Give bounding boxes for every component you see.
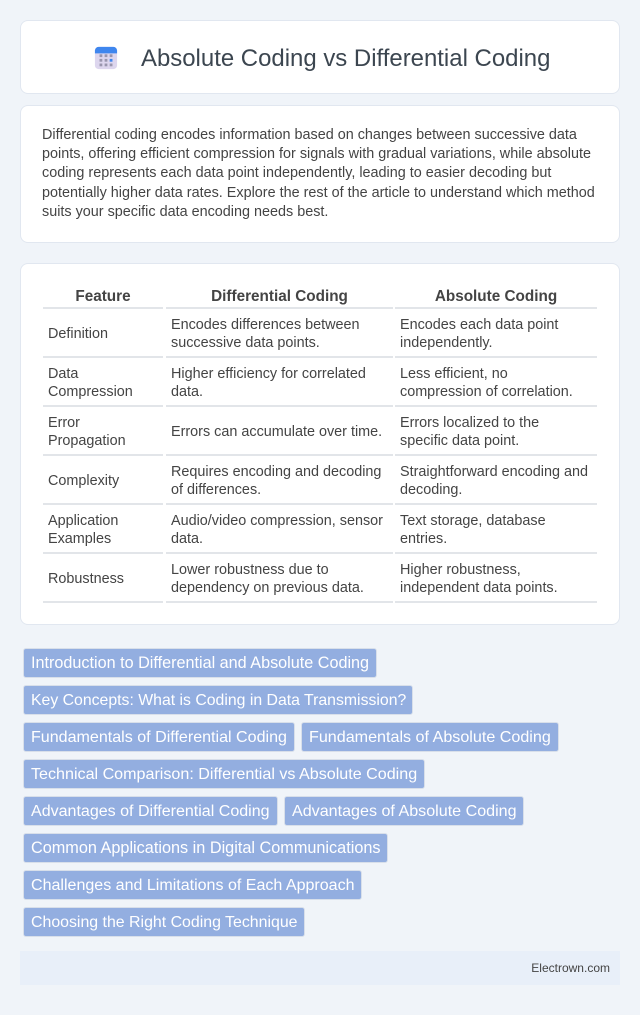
intro paragraph: Differential coding encodes information based on changes between successive data bbox=[42, 126, 577, 142]
row: definition: Definition bbox=[48, 326, 108, 342]
row: robustness: dependency on previous data. bbox=[171, 580, 364, 596]
comparison table: Differential Coding bbox=[211, 288, 348, 305]
row: complexity: Requires encoding and decoding bbox=[171, 464, 381, 480]
row: application examples: Examples bbox=[48, 531, 111, 547]
row: application examples: Application bbox=[48, 513, 118, 529]
footer bar bbox=[20, 951, 620, 985]
tag: Choosing the Right Coding Technique bbox=[31, 914, 298, 931]
tag: Challenges and Limitations of Each Approach bbox=[31, 876, 355, 894]
title: Absolute Coding vs Differential Coding bbox=[141, 45, 550, 72]
tag bbox=[23, 685, 413, 715]
header card bbox=[20, 20, 620, 94]
row: application examples bbox=[48, 513, 546, 547]
row: definition: Encodes differences between bbox=[171, 317, 360, 333]
row: data compression bbox=[48, 366, 573, 400]
row: data compression: Compression bbox=[48, 384, 133, 400]
tag: Common Applications in Digital Communications bbox=[31, 839, 381, 857]
row: data compression: Less efficient, no bbox=[400, 366, 508, 382]
comparison table panel bbox=[20, 263, 620, 625]
table header bbox=[75, 288, 557, 305]
row: error propagation: Errors can accumulate over time. bbox=[171, 424, 382, 440]
row: robustness bbox=[48, 562, 558, 596]
comparison table: Feature bbox=[75, 288, 131, 305]
row: complexity: decoding. bbox=[400, 482, 462, 498]
intro paragraph: points, offering efficient compression for signals with gradual variations, while absolute bbox=[42, 146, 591, 162]
intro paragraph: potentially higher data rates. Explore the rest of the article to understand which method bbox=[42, 185, 595, 201]
row: error propagation: Error bbox=[48, 415, 80, 431]
intro paragraph: coding represents each data point independently, leading to easier decoding but bbox=[42, 165, 551, 181]
tag: Key Concepts: What is Coding in Data Transmission? bbox=[31, 692, 406, 709]
tag bbox=[23, 722, 295, 752]
tag: Technical Comparison: Differential vs Absolute Coding bbox=[31, 765, 417, 783]
row: error propagation: specific data point. bbox=[400, 433, 519, 449]
tag: Introduction to Differential and Absolute Coding bbox=[31, 654, 369, 672]
tag bbox=[23, 648, 377, 678]
comparison table bbox=[43, 288, 597, 603]
icon: calendar grid bbox=[94, 46, 118, 70]
intro paragraph bbox=[42, 126, 595, 220]
row: robustness: Robustness bbox=[48, 571, 124, 587]
row: definition: Encodes each data point bbox=[400, 317, 558, 333]
row: application examples: data. bbox=[171, 531, 203, 547]
row: application examples: Audio/video compression, sensor bbox=[171, 513, 383, 529]
tag: Advantages of Absolute Coding bbox=[292, 802, 517, 820]
row: complexity: Straightforward encoding and bbox=[400, 464, 588, 480]
row: definition bbox=[48, 317, 558, 351]
row: complexity bbox=[48, 464, 588, 498]
tag bbox=[23, 833, 388, 863]
row: robustness: Higher robustness, bbox=[400, 562, 521, 578]
row: error propagation: Errors localized to the bbox=[400, 415, 539, 431]
row: complexity: of differences. bbox=[171, 482, 261, 498]
footer source: Electrown.com bbox=[531, 961, 610, 975]
row: error propagation bbox=[48, 415, 539, 449]
tag bbox=[23, 870, 362, 900]
tag: Fundamentals of Differential Coding bbox=[31, 728, 287, 746]
tag bbox=[284, 796, 524, 826]
comparison table: Absolute Coding bbox=[435, 288, 557, 305]
tag: Fundamentals of Absolute Coding bbox=[309, 728, 551, 746]
tag bbox=[301, 722, 559, 752]
row: definition: independently. bbox=[400, 335, 493, 351]
row: data compression: Higher efficiency for correlated bbox=[171, 366, 366, 382]
tag bbox=[23, 796, 278, 826]
row: error propagation: Propagation bbox=[48, 433, 126, 449]
row: application examples: entries. bbox=[400, 531, 447, 547]
row: data compression: Data bbox=[48, 366, 78, 382]
topic tags bbox=[23, 648, 559, 937]
intro text panel bbox=[20, 105, 620, 243]
row: data compression: data. bbox=[171, 384, 203, 400]
tag bbox=[23, 907, 305, 937]
row: robustness: Lower robustness due to bbox=[171, 562, 329, 578]
tag bbox=[23, 759, 425, 789]
row: definition: successive data points. bbox=[171, 335, 320, 351]
row: complexity: Complexity bbox=[48, 473, 119, 489]
row: data compression: compression of correlation. bbox=[400, 384, 573, 400]
tag: Advantages of Differential Coding bbox=[31, 802, 270, 820]
row: robustness: independent data points. bbox=[400, 580, 558, 596]
intro paragraph: suits your specific data encoding needs best. bbox=[42, 204, 328, 220]
row: application examples: Text storage, database bbox=[400, 513, 546, 529]
